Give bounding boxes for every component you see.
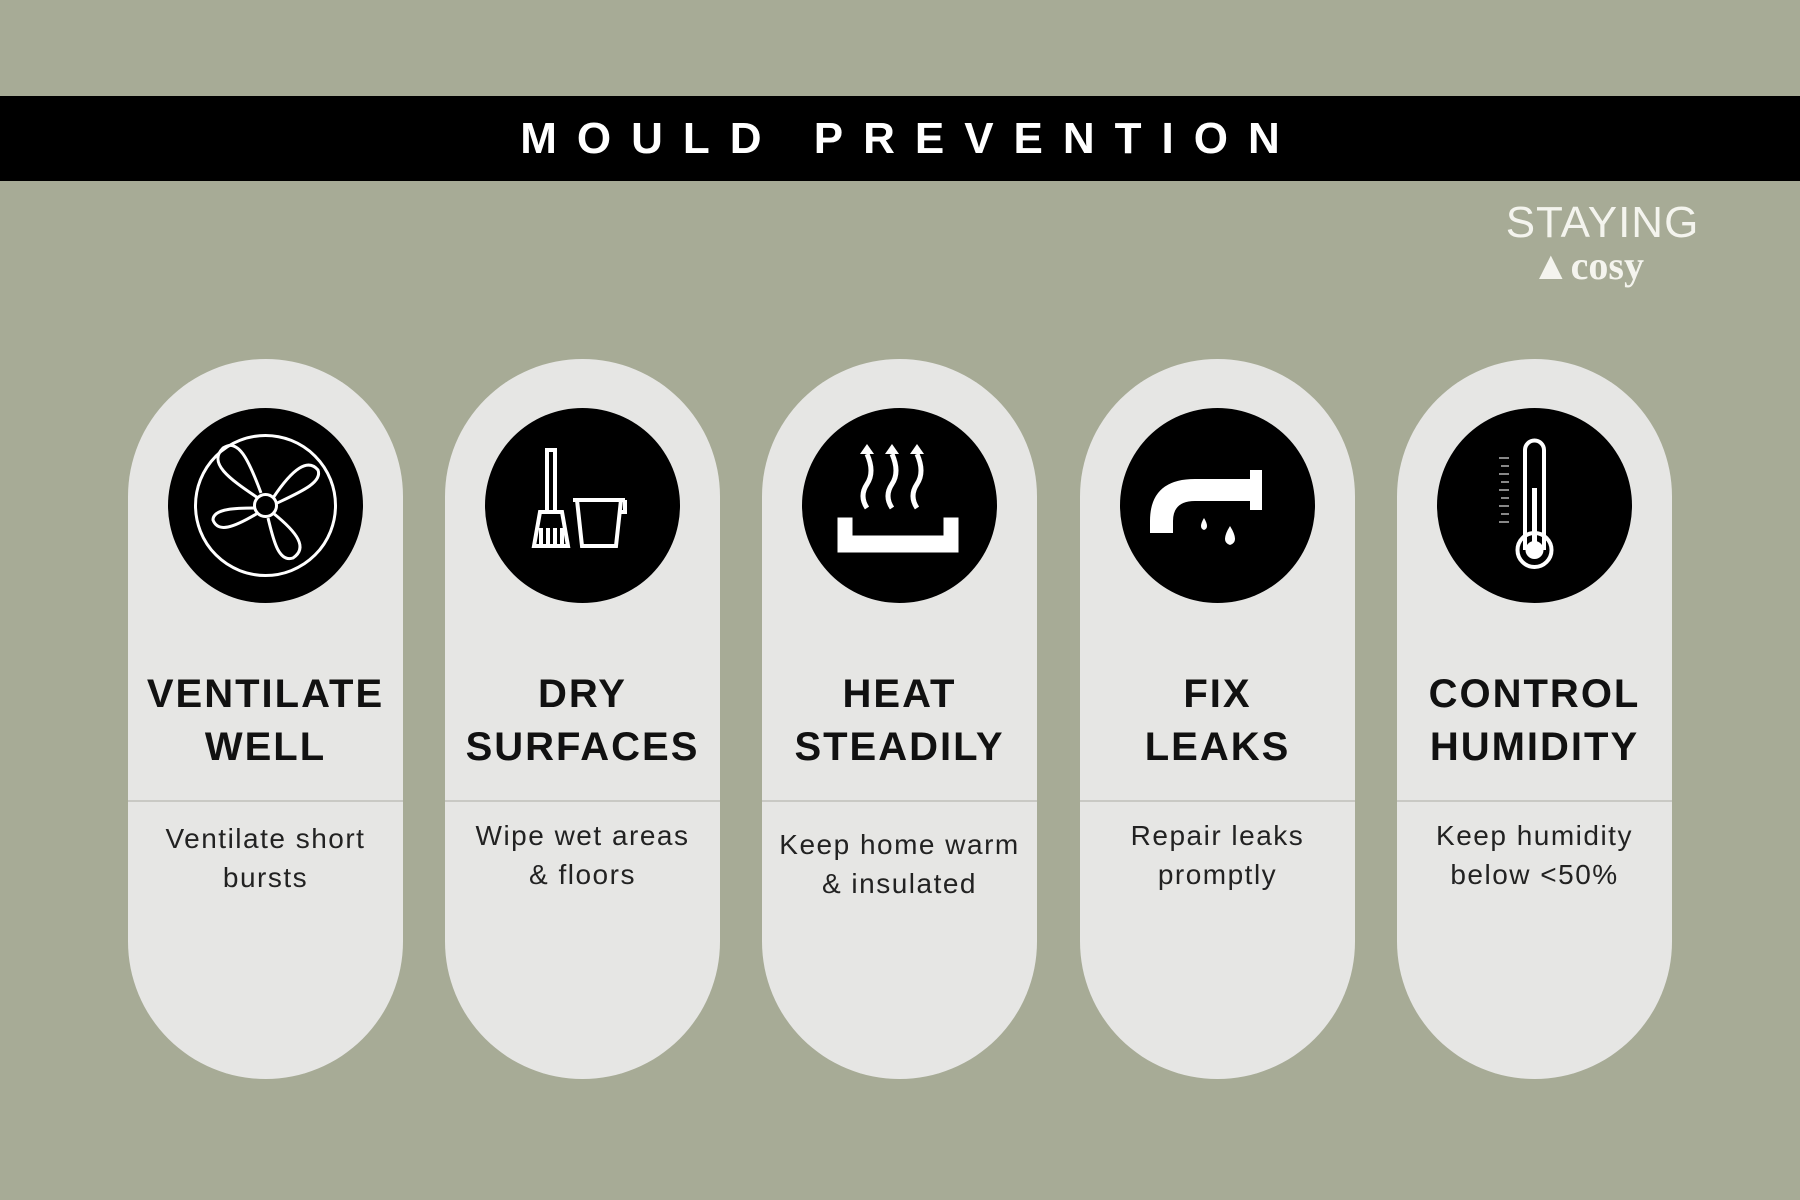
logo bbox=[1506, 198, 1699, 288]
panel: leaks bbox=[1080, 359, 1355, 1079]
heading: DRY bbox=[538, 672, 627, 716]
heading: HEAT bbox=[843, 672, 956, 716]
heading: WELL bbox=[205, 725, 326, 769]
heading bbox=[794, 672, 1005, 769]
logo: STAYING bbox=[1506, 198, 1699, 247]
heading: CONTROL bbox=[1429, 672, 1640, 716]
description bbox=[476, 820, 689, 890]
description: & floors bbox=[529, 859, 636, 890]
heading: HUMIDITY bbox=[1430, 725, 1639, 769]
panel: heat bbox=[762, 359, 1037, 1079]
description: bursts bbox=[223, 862, 308, 893]
description bbox=[779, 829, 1020, 899]
icon: fan bbox=[168, 408, 363, 603]
description: Ventilate short bbox=[166, 823, 365, 854]
icon: thermometer bbox=[1437, 408, 1632, 603]
icon: broom and bucket bbox=[485, 408, 680, 603]
description: Keep humidity bbox=[1436, 820, 1633, 851]
heading: SURFACES bbox=[466, 725, 699, 769]
panel: dry bbox=[445, 359, 720, 1079]
icon: tap bbox=[1120, 408, 1315, 603]
panel: humidity bbox=[1397, 359, 1672, 1079]
title bar bbox=[0, 96, 1800, 181]
heading: VENTILATE bbox=[147, 672, 384, 716]
heading bbox=[147, 672, 384, 769]
heading: FIX bbox=[1183, 672, 1252, 716]
heading bbox=[1429, 672, 1640, 769]
heading: LEAKS bbox=[1145, 725, 1290, 769]
title bar: MOULD PREVENTION bbox=[520, 114, 1300, 163]
description bbox=[1131, 820, 1304, 890]
logo: ▲cosy bbox=[1531, 243, 1644, 288]
description bbox=[1436, 820, 1633, 890]
description: promptly bbox=[1158, 859, 1277, 890]
description: Repair leaks bbox=[1131, 820, 1304, 851]
heading: STEADILY bbox=[794, 725, 1005, 769]
description: Wipe wet areas bbox=[476, 820, 689, 851]
heading bbox=[466, 672, 699, 769]
heading bbox=[1145, 672, 1290, 769]
panel: ventilate bbox=[128, 359, 403, 1079]
description: below <50% bbox=[1450, 859, 1619, 890]
icon: heat bbox=[802, 408, 997, 603]
description: & insulated bbox=[822, 868, 977, 899]
description: Keep home warm bbox=[779, 829, 1020, 860]
description bbox=[166, 823, 365, 893]
